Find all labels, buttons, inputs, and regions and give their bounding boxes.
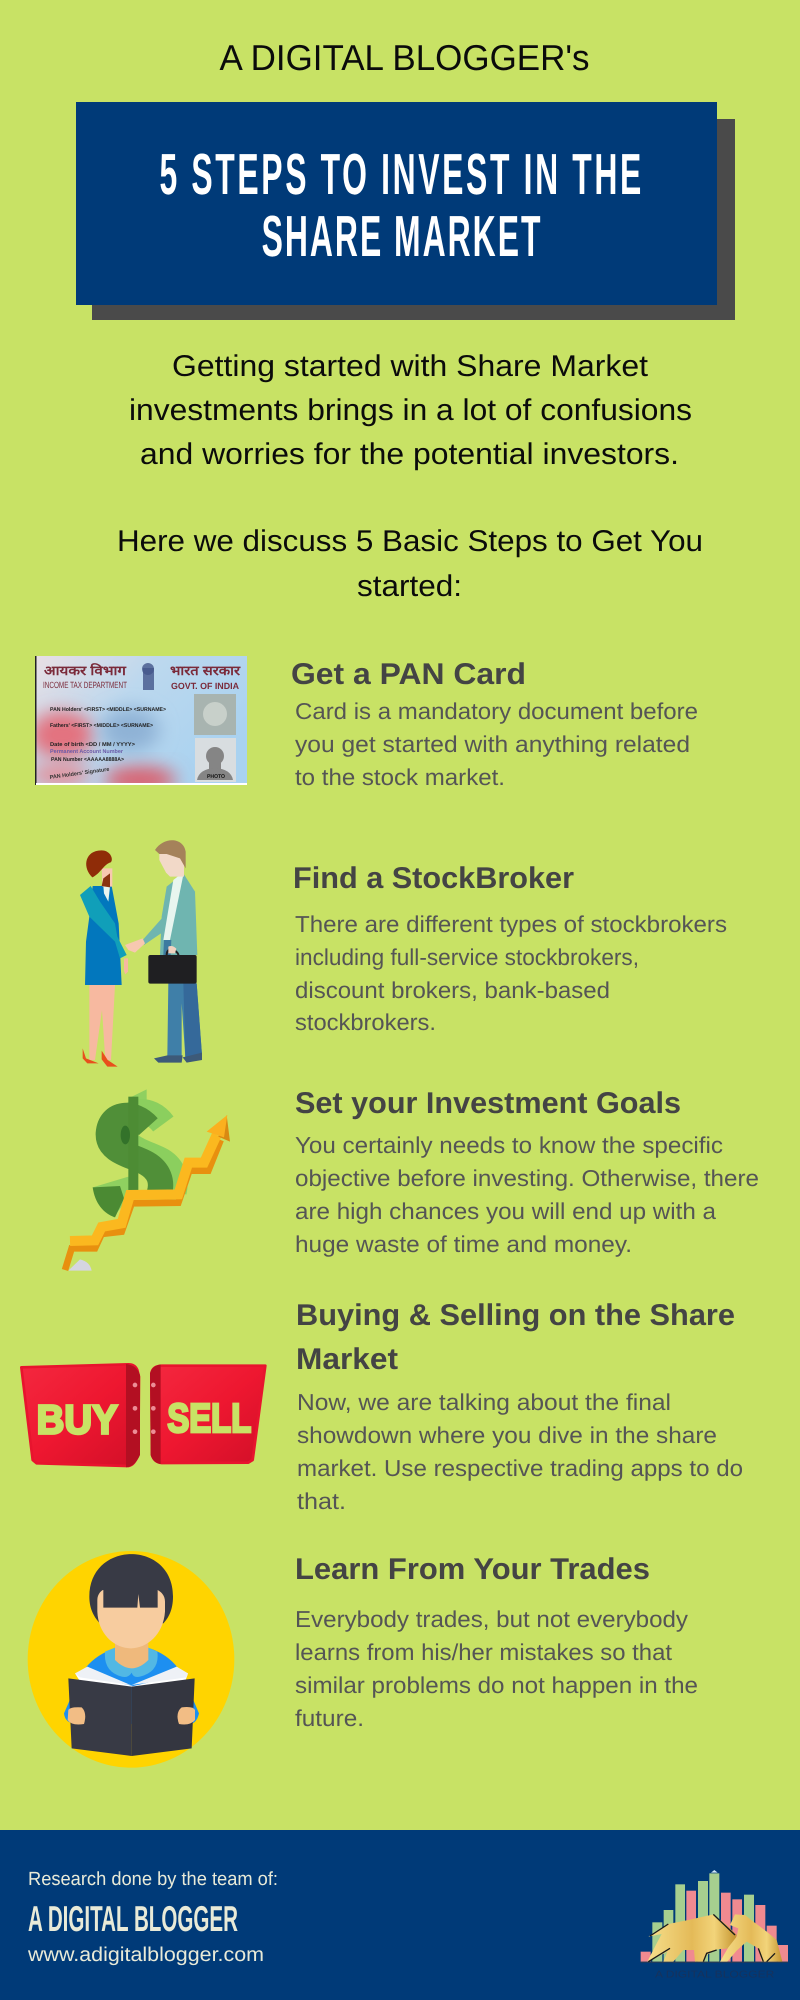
heading: buying and selling: Market: [296, 1343, 398, 1376]
heading: find a stockbroker: Find a StockBroker: [293, 862, 574, 895]
icon: PAN card: आयकर विभाग: [44, 663, 127, 678]
intro text: [117, 350, 703, 603]
panel: step 3 investment goals: [65, 1087, 759, 1271]
intro text: investments brings in a lot of confusions: [129, 394, 692, 427]
footer background: [0, 1830, 800, 2000]
text: stockbroker description: [295, 911, 727, 1035]
icon: PAN card: PAN Holders' Signature: [49, 767, 110, 781]
intro text: started:: [357, 570, 462, 603]
text: goals description: objective before investing. Otherwise, there: [295, 1165, 759, 1191]
intro text: Here we discuss 5 Basic Steps to Get You: [117, 525, 703, 558]
icon: logo with bull and bear: A DIGITAL BLOGGER: [655, 1969, 774, 1980]
icon: buy and sell dice: BUY: [37, 1397, 118, 1442]
heading: set your investment goals: Set your Investment Goals: [295, 1087, 681, 1120]
text: stockbroker description: There are different types of stockbrokers: [295, 911, 727, 937]
icon: buy and sell dice: [21, 1364, 265, 1467]
icon: PAN card: Date of birth <DD / MM / YYYY>: [50, 742, 135, 748]
text: learning description: similar problems do not happen in the: [295, 1672, 698, 1698]
icon: two people shaking hands: [80, 840, 202, 1067]
banner title text: SHARE MARKET: [262, 204, 540, 269]
panel: step 1 PAN card: [30, 656, 698, 794]
panel: footer: [0, 1830, 800, 2000]
text: trading description: that.: [297, 1488, 346, 1514]
panel: step 4 buying and selling: [21, 1299, 743, 1514]
text: PAN card description: [295, 698, 698, 790]
icon: PAN card: PAN Holders' <FIRST> <MIDDLE> <SURNAME>: [50, 707, 166, 713]
intro text: Getting started with Share Market: [172, 350, 649, 383]
text: goals description: are high chances you will end up with a: [295, 1198, 716, 1224]
text: trading description: market. Use respective trading apps to do: [297, 1455, 743, 1481]
heading: learn from your trades: Learn From Your Trades: [295, 1553, 650, 1586]
heading: buying and selling: Buying & Selling on the Share: [296, 1299, 735, 1332]
text: stockbroker description: discount brokers, bank-based: [295, 977, 610, 1003]
text: footer brand: A DIGITAL BLOGGER: [28, 1898, 238, 1939]
text: PAN card description: to the stock market.: [295, 764, 505, 790]
icon: logo with bull and bear: [641, 1870, 788, 1980]
text: trading description: [297, 1389, 743, 1514]
text: goals description: [295, 1132, 759, 1257]
icon: buy and sell dice: SELL: [167, 1395, 251, 1441]
text: learning description: future.: [295, 1705, 364, 1731]
text: learning description: [295, 1606, 698, 1731]
icon: PAN card: PHOTO: [207, 774, 226, 780]
banner title text: [160, 142, 641, 269]
intro text: and worries for the potential investors.: [140, 438, 679, 471]
text: PAN card description: you get started with anything related: [295, 731, 690, 757]
text: goals description: huge waste of time and money.: [295, 1231, 632, 1257]
text: learning description: Everybody trades, but not everybody: [295, 1606, 689, 1632]
title banner: [76, 102, 735, 320]
text: stockbroker description: stockbrokers.: [295, 1009, 436, 1035]
icon: PAN card: GOVT. OF INDIA: [171, 681, 239, 691]
text: goals description: You certainly needs to know the specific: [295, 1132, 723, 1158]
text: trading description: showdown where you dive in the share: [297, 1422, 717, 1448]
banner title text: 5 STEPS TO INVEST IN THE: [160, 142, 641, 207]
heading: get a PAN card: Get a PAN Card: [291, 658, 526, 691]
icon: PAN card: भारत सरकार: [170, 663, 241, 678]
panel: step 2 stockbroker: [80, 840, 727, 1067]
banner box: [76, 102, 717, 305]
text: stockbroker description: including full-service stockbrokers,: [295, 944, 639, 970]
panel: step 5 learn from trades: [28, 1551, 698, 1768]
banner shadow: [92, 119, 735, 320]
text: website: www.adigitalblogger.com: [27, 1944, 264, 1966]
icon: dollar sign and rising arrow: [65, 1089, 230, 1271]
text: PAN card description: Card is a mandatory document before: [295, 698, 698, 724]
icon: PAN card: INCOME TAX DEPARTMENT: [43, 680, 127, 690]
text: research credit: Research done by the team of:: [28, 1869, 278, 1890]
brand heading: A DIGITAL BLOGGER's: [220, 37, 590, 78]
icon: PAN card: [30, 656, 247, 794]
text: learning description: learns from his/her mistakes so that: [295, 1639, 673, 1665]
icon: PAN card: Fathers' <FIRST> <MIDDLE> <SURNAME>: [50, 723, 153, 729]
icon: PAN card: Permanent Account Number: [50, 749, 124, 755]
icon: person reading a book: [28, 1551, 234, 1768]
icon: PAN card: PAN Number <AAAAA8888A>: [51, 757, 124, 763]
heading: buying and selling: [296, 1299, 735, 1376]
text: trading description: Now, we are talking about the final: [297, 1389, 671, 1415]
